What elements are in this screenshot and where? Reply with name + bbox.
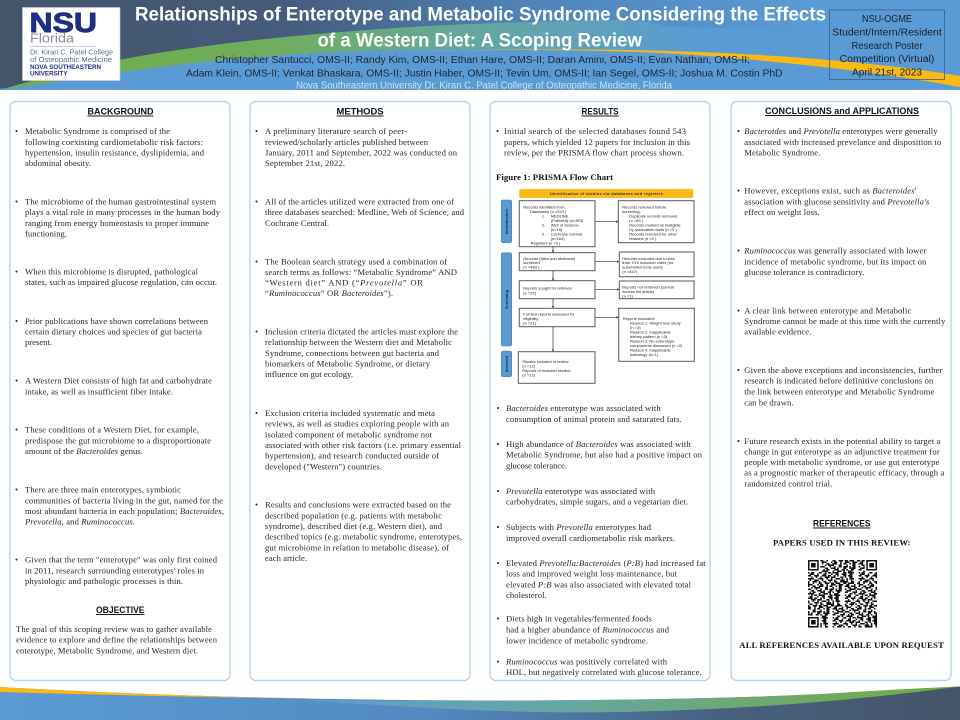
text: P:B ratio: cholesterol.	[506, 590, 547, 600]
text: diets high in vegetables: Diets high in vegetables/fermented foods	[506, 614, 652, 624]
text: ruminococcus correlation	[496, 656, 702, 677]
box: records identified: Cochrane Central	[551, 232, 582, 236]
text: exclusion criteria: Exclusion criteria included systematic and meta	[265, 408, 435, 418]
text: results and conclusions extraction: each article.	[265, 553, 307, 563]
text: literature search: September 21st, 2022.	[265, 158, 345, 168]
box: records identified: (n=16)	[551, 227, 563, 232]
text: clear link: A clear link between enterotype and Metabolic	[744, 305, 911, 315]
competition box: April 21st, 2023	[852, 68, 922, 78]
text: P:B ratio: Elevated Prevotella:Bacteroides (P:B) had increased fat	[506, 558, 706, 568]
box: reports not retrieved: Reports not retrieved (cannot	[622, 284, 675, 290]
box: records screened: screened	[523, 260, 540, 265]
text: search strategy: •	[255, 256, 258, 266]
text: results and conclusions extraction: •	[255, 500, 258, 510]
text: exceptions: effect on weight loss.	[744, 207, 820, 217]
text: ruminococcus: incidence of metabolic syndrome, but its impact on	[744, 256, 927, 266]
text: conditions: •	[15, 425, 18, 435]
text: subjects with prevotella: •	[496, 522, 500, 532]
box: records identified: (n=164)	[551, 236, 565, 241]
box: records identified: Records identified from:	[523, 204, 566, 210]
box: reports excluded: Reason 1: Weight loss study	[630, 320, 681, 326]
box: records excluded: than 7/10 inclusion votes (no	[622, 260, 674, 265]
text: search strategy: The Boolean search strategy used a combination of	[265, 256, 447, 266]
chart: PRISMA flow chart	[501, 189, 694, 383]
text: exclusion criteria: developed ("Western") countries.	[265, 461, 382, 471]
text: all references: ALL REFERENCES AVAILABLE UPON REQUEST	[739, 640, 944, 650]
box: records excluded: Records excluded due to less	[622, 256, 675, 261]
text: metabolic syndrome: abdominal obesity.	[25, 158, 91, 168]
text: results and conclusions extraction: gut microbiome in relation to metabolic disease), of	[265, 542, 449, 552]
text: prior publications: Prior publications have shown correlations between	[25, 316, 209, 326]
box: studies included	[518, 352, 595, 383]
box: full text assessed: Full text reports assessed for	[523, 312, 575, 316]
text: databases: three databases searched: Medline, Web of Science, and	[265, 207, 465, 217]
text: bacteroides enterotype	[496, 403, 682, 424]
box: studies included: (n =12)	[522, 372, 536, 378]
text: high abundance: High abundance of Bacteroides was associated with	[506, 439, 691, 449]
text: prior publications: •	[15, 316, 18, 326]
competition box: Student/Intern/Resident	[832, 28, 942, 38]
flow arrows	[552, 220, 619, 352]
text: further research: •	[737, 365, 740, 375]
text: ruminococcus: •	[737, 246, 740, 256]
text: enterotypes: Prevotella, and Ruminococcus.	[24, 516, 135, 526]
text: metabolic syndrome: hypertension, insulin resistance, dyslipidemia, and	[25, 148, 205, 158]
text: disruption: When this microbiome is disrupted, pathological	[25, 266, 199, 276]
box: reports not retrieved: (n =1)	[622, 294, 634, 298]
box: records screened: (n =483 )	[523, 264, 540, 270]
box: records identified: Databases (n =543 )	[530, 209, 567, 214]
text: results and conclusions extraction	[255, 500, 462, 563]
panel: conclusions and references	[731, 102, 951, 680]
stage label: screening: Screening	[504, 289, 509, 309]
heading: methods: METHODS	[336, 106, 384, 118]
text: clear link	[737, 305, 946, 337]
text: exceptions: •	[737, 186, 740, 196]
text: literature search: January, 2011 and September, 2022 was conducted on	[265, 148, 458, 158]
competition box	[830, 10, 944, 80]
stage label: included	[501, 351, 512, 377]
text: western diet: •	[15, 376, 18, 386]
box: records removed: by automation tools (n =0 )	[629, 227, 677, 232]
panel: results	[490, 102, 710, 680]
text: results and conclusions extraction: described population (e.g. patients with metabolic	[265, 510, 442, 520]
text: exclusion criteria: hypertension), and research conducted outside of	[265, 451, 439, 461]
box: reports sought	[519, 281, 595, 299]
text: enterotypes: communities of bacteria living in the gut, named for the	[25, 495, 223, 505]
text: microbiome	[15, 196, 221, 238]
text: search strategy	[255, 256, 457, 298]
box: reports not retrieved: access full article)	[622, 289, 655, 294]
text: diets high in vegetables: had a higher abundance of Ruminococcus and	[506, 625, 670, 635]
text: generally associated: Bacteroides and Prevotella enterotypes were generally	[744, 126, 938, 136]
heading: figure 1: Figure 1: PRISMA Flow Chart	[496, 172, 613, 182]
box: records removed	[618, 201, 694, 243]
text: results and conclusions extraction: Results and conclusions were extracted based on the	[265, 500, 451, 510]
text: search strategy: search terms as follows: “Metabolic Syndrome” AND	[265, 267, 457, 277]
competition box: NSU-OGME	[862, 14, 912, 25]
text: initial search	[496, 126, 691, 158]
text: conditions: amount of the Bacteroides genus.	[25, 446, 143, 456]
text: objective	[16, 624, 218, 655]
text: western diet: intake, as well as insufficient fiber intake.	[25, 386, 173, 396]
text: clear link: Syndrome cannot be made at this time with the currently	[744, 316, 946, 326]
panel: methods	[250, 102, 470, 680]
text: generally associated: associated with increased prevelance and disposition to	[744, 137, 941, 147]
text: objective: enterotype, Metabolic Syndrome, and Western diet.	[16, 645, 198, 655]
text: results and conclusions extraction: described topics (e.g. metabolic syndrome, enterotypes,	[265, 532, 462, 542]
text: literature search: •	[255, 126, 258, 136]
flow header	[519, 189, 693, 198]
title: Relationships of Enterotype and Metabolic Syndrome Considering the Effects	[135, 4, 826, 26]
box: reports excluded: pathology (n=1)	[630, 352, 659, 357]
text: high abundance: Metabolic Syndrome, but also had a positive impact on	[506, 450, 703, 460]
text: western diet	[15, 376, 212, 396]
text: initial search: Initial search of the selected databases found 543	[504, 126, 686, 136]
text: enterotypes: most abundant bacteria in each population; Bacteroides,	[25, 506, 224, 516]
box: records screened: Records (titles and abstracts)	[523, 256, 576, 261]
text: P:B ratio: elevated P:B was also associated with elevated total	[506, 579, 692, 589]
text: inclusion criteria: relationship between the Western diet and Metabolic	[265, 337, 452, 347]
text: microbiome: •	[15, 196, 18, 206]
box: records identified: 3.	[542, 232, 545, 236]
heading: results: RESULTS	[582, 106, 619, 118]
text: future research: Future research exists in the potential ability to target a	[744, 436, 940, 446]
text: initial search: review, per the PRISMA flow chart process shown.	[504, 148, 684, 158]
text: diets high in vegetables: lower incidence of metabolic syndrome.	[506, 635, 648, 645]
box: records identified: Web of Science	[551, 222, 579, 228]
text: future research: •	[737, 436, 740, 446]
text: databases: •	[255, 196, 258, 206]
text: bacteroides enterotype: consumption of animal protein and saturated fats.	[506, 414, 682, 424]
logo: NSU Florida: of Osteopathic Medicine	[30, 57, 112, 64]
text: prevotella enterotype	[496, 486, 688, 507]
box: full text assessed	[519, 308, 595, 327]
box: records identified: MEDLINE	[551, 214, 569, 218]
text: generally associated: Metabolic Syndrome.	[744, 148, 820, 158]
text: exclusion criteria: reviews, as well as studies exploring people with an	[265, 419, 450, 429]
box: studies included: Studies included in review	[522, 359, 569, 364]
title: of a Western Diet: A Scoping Review	[318, 30, 642, 52]
title	[135, 4, 826, 52]
box: reports excluded: Reason 2: Inapplicable	[630, 330, 671, 334]
stage label: identification	[501, 200, 512, 243]
text: further research	[737, 365, 942, 407]
competition box: Competition (Virtual)	[840, 54, 934, 65]
text: further research: Given the above exceptions and inconsistencies, further	[744, 365, 942, 375]
stage label: included: Included	[504, 355, 509, 372]
text: P:B ratio: •	[496, 558, 500, 568]
text: future research: people with metabolic syndrome, or use gut enterotype	[744, 457, 939, 467]
box: records removed: screening:	[622, 209, 641, 214]
header banner	[0, 0, 960, 90]
box: studies included: Reports of included studies	[522, 368, 571, 373]
heading: background: BACKGROUND	[88, 106, 154, 118]
authors: Christopher Santucci, OMS-II; Randy Kim, OMS-II; Ethan Hare, OMS-II; Daran Amini, OMS-II; Evan Nathan, OMS-II;	[215, 54, 750, 66]
text: disruption	[15, 266, 217, 287]
box: reports not retrieved	[619, 281, 694, 299]
text: prevotella enterotype: •	[496, 486, 500, 496]
box: records removed: Records removed for other	[629, 232, 678, 236]
text: inclusion criteria: biomarkers of Metabolic Syndrome, or dietary	[265, 358, 431, 368]
box: records removed: (n =60 )	[629, 218, 644, 223]
box: reports excluded: components discussed (n =2)	[630, 343, 683, 348]
authors: Adam Klein, OMS-II; Venkat Bhaskara, OMS-II; Justin Haber, OMS-II; Tevin Um, OMS-II; Ian Segel, OMS-II; Joshua M. Costin PhD	[186, 67, 783, 79]
box: records excluded: (n =447)	[622, 269, 638, 274]
box: records identified: 2.	[542, 222, 545, 228]
text: exclusion criteria: isolated component of metabolic syndrome not	[265, 429, 433, 439]
text: search strategy: “Ruminococcus” OR Bacteroides”).	[265, 288, 393, 298]
panel: background and objective	[10, 102, 230, 680]
text: disruption: •	[15, 266, 18, 276]
text: papers used: PAPERS USED IN THIS REVIEW:	[773, 537, 911, 547]
box: records identified: 1.	[542, 214, 545, 218]
text: future research: change in gut enterotype as an adjunctive treatment for	[744, 446, 940, 456]
authors	[186, 54, 783, 79]
box: reports excluded: Reports excluded:	[623, 316, 655, 321]
text: enterotypes	[15, 485, 224, 526]
competition box: Research Poster	[852, 41, 923, 52]
text: literature search: A preliminary literature search of peer-	[265, 126, 407, 136]
text: search strategy: “Western diet” AND (“Prevotella” OR	[265, 278, 423, 288]
logo: NSU Florida: Dr. Kiran C. Patel College	[30, 49, 113, 56]
text: exclusion criteria: associated with other risk factors (i.e. primary essential	[265, 440, 462, 450]
text: metabolic syndrome: Metabolic Syndrome is comprised of the	[25, 126, 170, 136]
text: inclusion criteria	[255, 327, 458, 379]
text: literature search	[255, 126, 458, 168]
text: microbiome: plays a vital role in many processes in the human body	[25, 207, 221, 217]
text: prevotella enterotype: Prevotella enterotype was associated with	[505, 486, 656, 496]
text: diets high in vegetables	[496, 614, 670, 645]
logo: NSU Florida: NOVA SOUTHEASTERN	[30, 64, 101, 71]
text: prevotella enterotype: carbohydrates, simple sugars, and a vegetarian diet.	[506, 497, 688, 507]
text: enterotypes: There are three main enterotypes, symbiotic	[25, 485, 181, 495]
text: generally associated	[737, 126, 941, 158]
box: records removed: Duplicate records removed	[629, 214, 677, 218]
text: high abundance: glucose tolerance.	[506, 460, 567, 470]
logo: NSU Florida: Florida	[30, 31, 75, 46]
box: full text assessed: (n =21)	[523, 320, 537, 326]
text: ruminococcus	[737, 246, 927, 277]
text: microbiome: ranging from energy homeostasis to proper immune	[25, 218, 209, 228]
text: clear link: available evidence.	[744, 327, 811, 337]
text: objective: evidence to explore and define the relationships between	[16, 635, 218, 645]
text: bacteroides enterotype: •	[496, 403, 500, 413]
icon: QR code	[808, 560, 877, 628]
box: records removed: Records marked as ineligible	[629, 222, 681, 228]
text: prior publications: present.	[25, 337, 52, 347]
text: exclusion criteria: •	[255, 408, 258, 418]
text: exceptions	[737, 186, 930, 217]
text: exceptions: However, exceptions exist, such as Bacteroides'	[744, 186, 917, 196]
box: records removed: reasons (n =0 )	[629, 236, 657, 241]
text: exclusion criteria	[255, 408, 462, 471]
text: P:B ratio: loss and improved weight loss maintenance, but	[506, 569, 678, 579]
text: subjects with prevotella	[496, 522, 675, 543]
text: conditions: These conditions of a Western Diet, for example,	[25, 425, 199, 435]
text: initial search: •	[496, 126, 499, 136]
box: reports sought: Reports sought for retrieval	[523, 286, 572, 290]
text: subjects with prevotella: improved overall cardiometabolic risk markers.	[506, 533, 675, 543]
text: databases	[255, 196, 465, 228]
text: conditions	[15, 425, 211, 456]
text: conditions: predispose the gut microbiome to a disproportionate	[25, 435, 211, 445]
box: studies included: (n =12)	[522, 364, 536, 368]
text: ruminococcus correlation: Ruminococcus was positively correlated with	[505, 656, 668, 666]
text: further research: the link between enterotype and Metabolic Syndrome	[744, 387, 934, 397]
box: records excluded	[619, 252, 694, 277]
text: inclusion criteria: influence on gut ecology.	[265, 369, 353, 379]
text: term enterotype: •	[15, 555, 18, 565]
text: microbiome: The microbiome of the human gastrointestinal system	[25, 196, 216, 206]
box: records identified	[519, 201, 595, 247]
box: reports excluded: (n =3)	[630, 325, 641, 330]
text: ruminococcus: glucose tolerance is contradictory.	[744, 267, 864, 277]
text: further research: research is indicated before definitive conclusions on	[744, 376, 934, 386]
text: results and conclusions extraction: syndrome), described diet (e.g. Western diet), and	[265, 521, 443, 531]
box: records screened	[519, 253, 595, 271]
text: ruminococcus correlation: •	[496, 656, 500, 666]
affiliation: Nova Southeastern University Dr. Kiran C. Patel College of Osteopathic Medicine, Florida	[296, 80, 672, 92]
text: databases: All of the articles utilized were extracted from one of	[265, 196, 454, 206]
text: prior publications: certain dietary choices and species of gut bacteria	[25, 326, 202, 336]
text: future research	[737, 436, 944, 489]
text: high abundance	[496, 439, 703, 470]
text: P:B ratio	[496, 558, 706, 600]
stage label: identification: Identification	[504, 208, 509, 234]
text: exceptions: association with glucose sensitivity and Prevotella's	[744, 196, 930, 206]
text: western diet: A Western Diet consists of high fat and carbohydrate	[25, 376, 212, 386]
box: records excluded: automation tools used)	[622, 264, 663, 270]
text: future research: as a prognostic marker of therapeutic efficacy, through a	[744, 468, 944, 478]
text: term enterotype	[15, 555, 218, 586]
text: inclusion criteria: •	[255, 327, 258, 337]
logo: NSU Florida: UNIVERSITY	[30, 71, 68, 78]
text: clear link: •	[737, 305, 740, 315]
text: term enterotype: in 2011, research surrounding enterotypes' roles in	[25, 565, 205, 575]
text: initial search: papers, which yielded 12 papers for inclusion in this	[504, 137, 691, 147]
text: disruption: states, such as impaired glucose regulation, can occur.	[25, 277, 217, 287]
box: reports excluded: dietary pattern (n =3)	[630, 334, 668, 339]
box: records removed: Records removed before	[622, 204, 667, 210]
text: metabolic syndrome: •	[15, 126, 18, 136]
box: records identified: Registers (n =0 )	[531, 240, 561, 246]
text: term enterotype: Given that the term "enterotype" was only first coined	[25, 555, 218, 565]
text: subjects with prevotella: Subjects with Prevotella enterotypes had	[506, 522, 652, 532]
box: reports excluded	[619, 308, 694, 361]
text: inclusion criteria: Inclusion criteria dictated the articles must explore the	[265, 327, 458, 337]
text: objective: The goal of this scoping review was to gather available	[16, 624, 212, 634]
box: reports sought: (n =22)	[523, 290, 537, 296]
text: diets high in vegetables: •	[496, 614, 500, 624]
text: generally associated: •	[737, 126, 740, 136]
text: ruminococcus: Ruminococcus was generally associated with lower	[743, 246, 926, 256]
text: microbiome: functioning.	[25, 228, 67, 238]
text: metabolic syndrome	[15, 126, 205, 168]
heading: conclusions: CONCLUSIONS and APPLICATIONS	[765, 106, 920, 117]
text: prior publications	[15, 316, 209, 347]
heading: objective: OBJECTIVE	[96, 605, 145, 616]
text: databases: Cochrane Central.	[265, 218, 329, 228]
stage label: screening	[501, 253, 512, 346]
text: metabolic syndrome: following coexisting cardiometabolic risk factors:	[25, 137, 203, 147]
logo: NSU Florida: NSU	[30, 7, 97, 38]
box: full text assessed: eligibility	[523, 316, 538, 321]
text: further research: can be drawn.	[744, 397, 794, 407]
text: future research: randomized control trial.	[744, 479, 832, 489]
box: reports excluded: Reason 3: No enterotype	[630, 338, 675, 344]
logo: NSU Florida	[22, 7, 120, 80]
box: reports excluded: Reason 4: Inapplicable	[630, 348, 671, 352]
text: enterotypes: •	[15, 485, 18, 495]
heading: references: REFERENCES	[813, 518, 871, 530]
text: inclusion criteria: Syndrome, connections between gut bacteria and	[265, 348, 440, 358]
box: records identified: (PubMed) (n=363)	[551, 218, 584, 223]
text: high abundance: •	[496, 439, 500, 449]
text: term enterotype: physiologic and pathologic processes is thin.	[25, 576, 183, 586]
flow header: Identification of studies via databases and registers	[550, 191, 664, 196]
text: bacteroides enterotype: Bacteroides enterotype was associated with	[506, 403, 661, 413]
text: ruminococcus correlation: HDL, but negatively correlated with glucose tolerance.	[506, 667, 702, 677]
text: literature search: reviewed/scholarly articles published between	[265, 137, 429, 147]
footer banner	[0, 686, 960, 720]
